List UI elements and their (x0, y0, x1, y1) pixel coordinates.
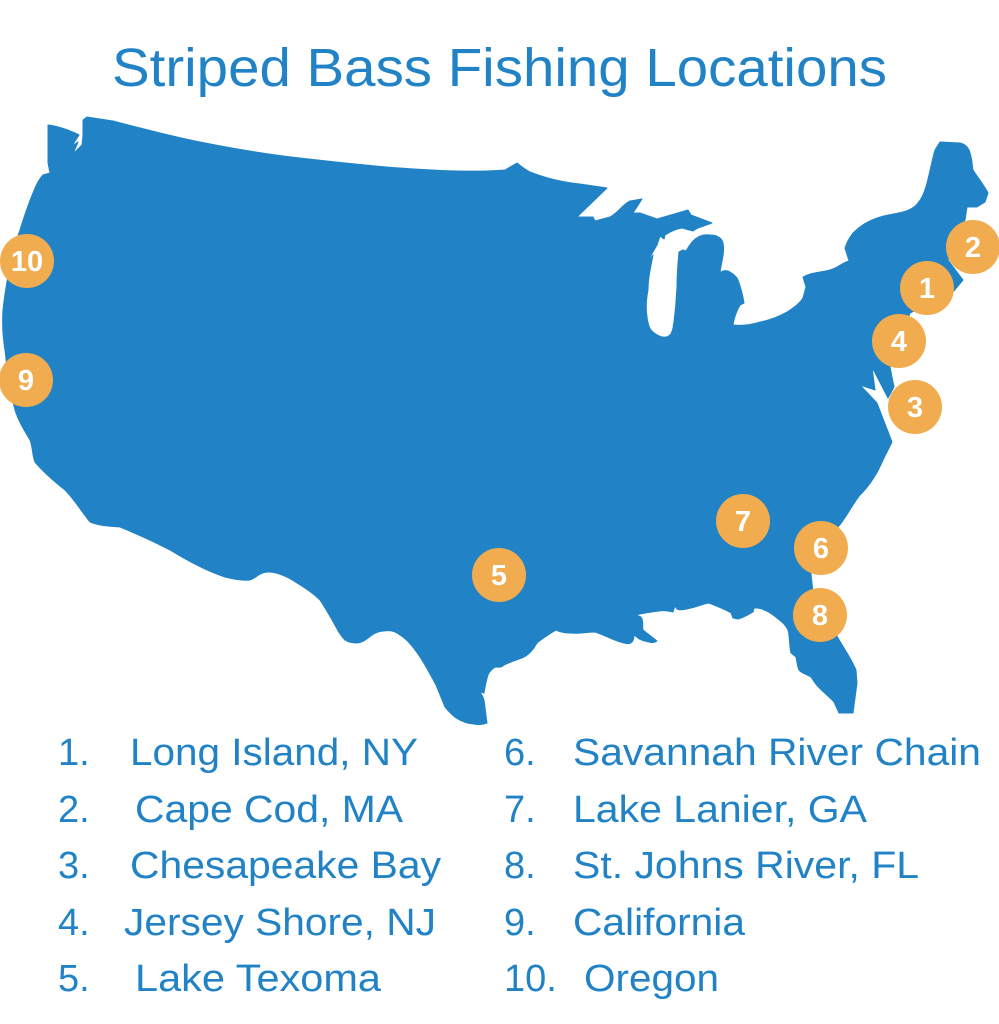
item 5 (58, 958, 382, 1000)
marker 10: Oregon: 10 (11, 246, 43, 278)
legend: right column (504, 732, 981, 1000)
marker 8: St. Johns River: 8 (812, 600, 828, 632)
title: Striped Bass Fishing Locations (112, 38, 887, 98)
item 4: 4. (58, 902, 90, 944)
marker 5: Lake Texoma (472, 548, 526, 602)
marker 1: Long Island: 1 (919, 273, 935, 305)
map: continental United States silhouette (3, 117, 988, 725)
item 3: 3. (58, 845, 90, 887)
item 10: 10. (504, 958, 557, 1000)
item 5: 5. (58, 958, 90, 1000)
marker 2: Cape Cod: 2 (965, 232, 981, 264)
marker 1: Long Island (900, 261, 954, 315)
marker 3: Chesapeake Bay (888, 380, 942, 434)
legend: left column (58, 732, 441, 1000)
item 2: 2. (58, 789, 90, 831)
item 6: Savannah River Chain (573, 732, 981, 774)
item 8: St. Johns River, FL (573, 845, 919, 887)
item 7: 7. (504, 789, 536, 831)
marker 9: California: 9 (18, 365, 34, 397)
item 6: 6. (504, 732, 536, 774)
item 9 (504, 902, 746, 944)
item 8: 8. (504, 845, 536, 887)
item 2: Cape Cod, MA (135, 789, 404, 831)
marker 9: California (0, 353, 53, 407)
item 1: Long Island, NY (130, 732, 418, 774)
marker 5: Lake Texoma: 5 (491, 560, 507, 592)
marker 4: Jersey Shore (872, 314, 926, 368)
marker 7: Lake Lanier: 7 (735, 506, 751, 538)
item 9: 9. (504, 902, 536, 944)
item 10 (504, 958, 719, 1000)
marker 6: Savannah River Chain: 6 (813, 533, 829, 565)
item 9: California (573, 902, 746, 944)
marker 10: Oregon (0, 234, 54, 288)
marker 6: Savannah River Chain (794, 521, 848, 575)
marker 3: Chesapeake Bay: 3 (907, 392, 923, 424)
marker 2: Cape Cod (946, 220, 999, 274)
item 7: Lake Lanier, GA (573, 789, 868, 831)
item 3: Chesapeake Bay (130, 845, 441, 887)
item 10: Oregon (584, 958, 719, 1000)
marker 7: Lake Lanier (716, 494, 770, 548)
marker 8: St. Johns River (793, 588, 847, 642)
marker 4: Jersey Shore: 4 (891, 326, 907, 358)
item 4: Jersey Shore, NJ (124, 902, 436, 944)
item 1: 1. (58, 732, 90, 774)
item 5: Lake Texoma (135, 958, 382, 1000)
